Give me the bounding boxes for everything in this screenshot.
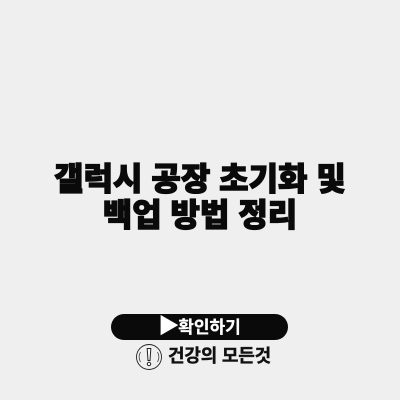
brand name: 건강의 모든것 — [168, 346, 271, 366]
title: 백업 방법 정리 — [103, 197, 297, 233]
title — [54, 161, 346, 233]
button: confirm: ▶확인하기 — [158, 315, 241, 338]
icon: exclamation circle — [136, 344, 162, 370]
title line 1: 갤럭시 공장 초기화 및 — [54, 161, 346, 197]
button: confirm — [111, 314, 288, 340]
